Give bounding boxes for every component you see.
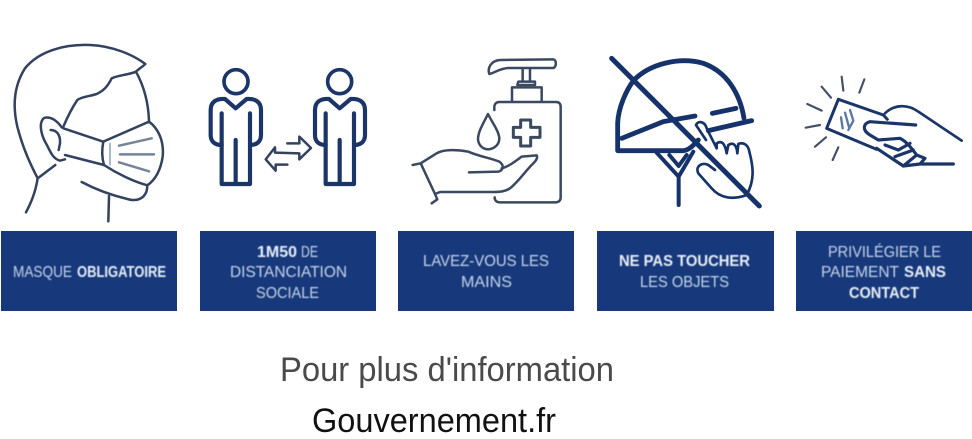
panel: lavez-vous les mains (398, 231, 574, 311)
panel: privilegier le paiement sans contact: PAIEMENT (821, 264, 900, 281)
panel: 1m50 de distanciation sociale: DISTANCIATION (230, 264, 347, 281)
panel: lavez-vous les mains: LAVEZ-VOUS LES (423, 253, 549, 270)
panel: privilegier le paiement sans contact: SANS (904, 264, 946, 281)
panel: ne pas toucher les objets: NE PAS TOUCHER (619, 253, 750, 270)
panel: 1m50 de distanciation sociale: SOCIALE (256, 285, 319, 302)
icon part: right person (315, 70, 365, 184)
icon: do not touch objects (crossed helmet and hand) (612, 58, 759, 206)
panel: 1m50 de distanciation sociale: 1M50 (257, 244, 297, 261)
icon part: slash (612, 58, 759, 206)
icon part: card (827, 99, 887, 149)
panel: lavez-vous les mains: MAINS (461, 274, 512, 291)
icon part: helmet (618, 61, 752, 205)
panel: masque obligatoire (1, 231, 177, 311)
icon part: pump bottle (489, 59, 561, 202)
panel: masque obligatoire: OBLIGATOIRE (77, 264, 166, 281)
panel: privilegier le paiement sans contact: PRIVILÉGIER LE (828, 244, 941, 261)
icon: contactless card payment (806, 77, 962, 166)
icon part: double arrow (266, 137, 311, 171)
icon part: pointing hand (696, 122, 753, 198)
icon part: rays (806, 77, 864, 160)
panel: privilegier le paiement sans contact: CONTACT (849, 285, 919, 302)
icon part: mask body (63, 122, 163, 185)
icon: head with face mask (15, 45, 163, 221)
icon part: contactless waves (841, 110, 853, 130)
panel: ne pas toucher les objets (597, 231, 774, 311)
icon part: cross (513, 120, 540, 146)
text: pour plus d'information: Pour plus d'information (280, 351, 614, 389)
icon part: drop (478, 114, 499, 149)
panel: ne pas toucher les objets: LES OBJETS (640, 274, 729, 291)
icon: two people with distance arrows (211, 70, 365, 184)
text: gouvernement.fr: Gouvernement.fr (312, 402, 556, 439)
icon part: hand (413, 150, 503, 172)
panel: privilegier le paiement sans contact (796, 231, 972, 311)
panel: 1m50 de distanciation sociale (200, 231, 376, 311)
panel: masque obligatoire: MASQUE (13, 264, 72, 281)
icon part: hand (885, 106, 962, 141)
panel: 1m50 de distanciation sociale: DE (301, 244, 318, 261)
icon: hand sanitizer and hand (413, 59, 561, 203)
icon part: left person (211, 70, 261, 184)
